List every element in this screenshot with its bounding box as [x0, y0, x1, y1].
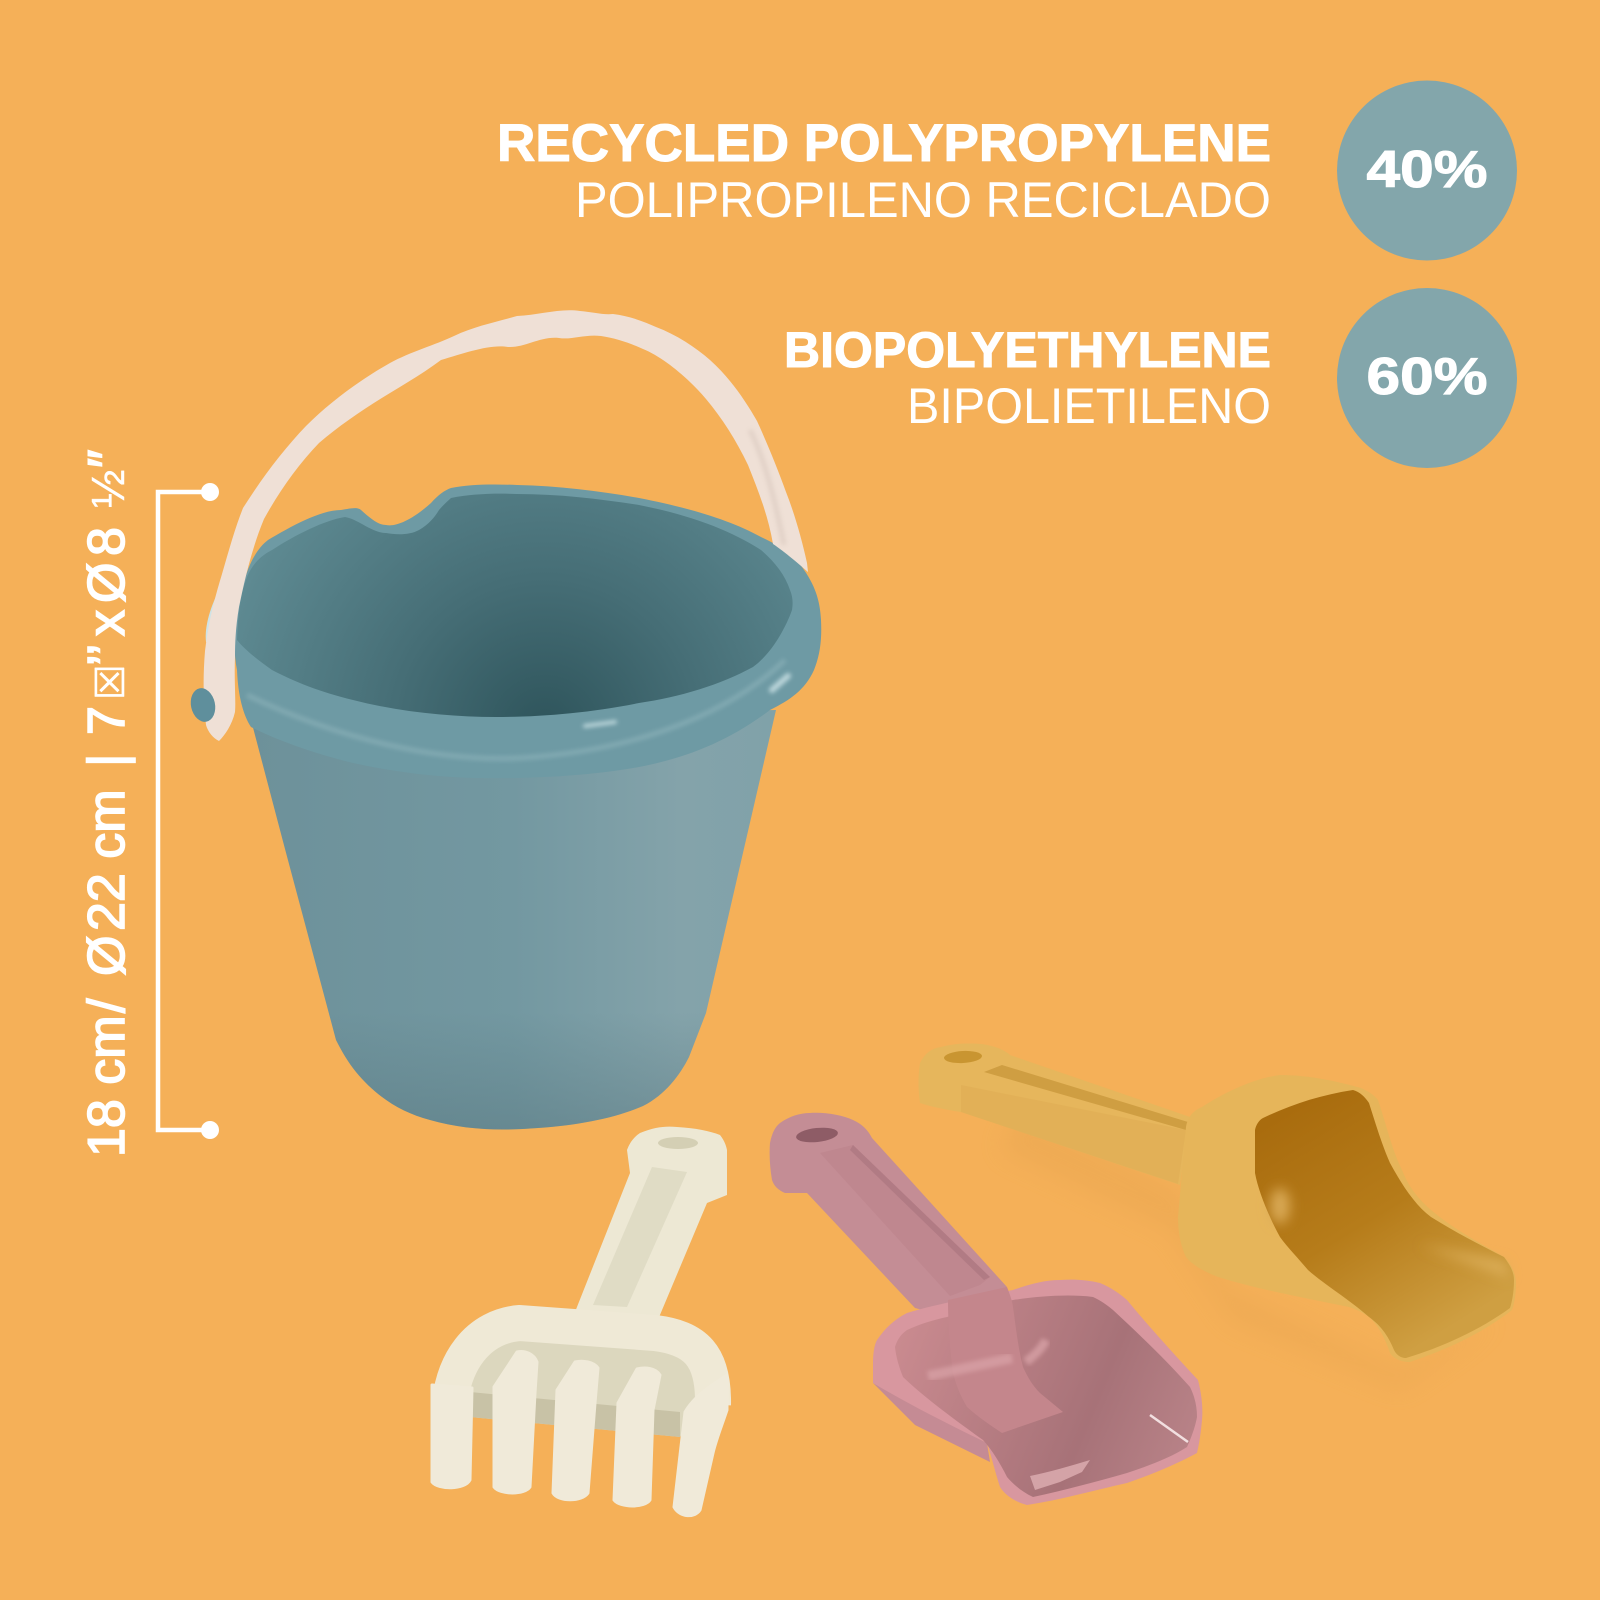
spade underside — [873, 1383, 990, 1462]
dimension label: 8 — [78, 527, 136, 556]
rake tines — [432, 1351, 727, 1516]
illustration: bucket — [188, 310, 821, 1129]
badge: 60%: 60% — [1366, 348, 1488, 406]
dimension label: 7 — [78, 706, 136, 735]
dimension label: ½ — [82, 470, 134, 508]
spade inner — [895, 1296, 1197, 1497]
bucket interior — [237, 494, 793, 717]
dimension label: Ø — [78, 936, 136, 976]
dimension label: 18 cm — [78, 1015, 136, 1157]
bucket handle — [204, 310, 808, 741]
heading: recycled polypropylene: RECYCLED POLYPROPYLENE — [497, 114, 1271, 173]
dimension label: x — [78, 610, 136, 636]
bucket body — [251, 710, 776, 1129]
scoop inner — [1255, 1090, 1514, 1358]
badge: 40% — [1337, 80, 1517, 260]
handle pivot tab — [206, 578, 228, 642]
spade highlights — [928, 1340, 1188, 1490]
dimension label: / — [78, 998, 136, 1013]
spade handle — [770, 1113, 1007, 1320]
subheading: bipolietileno: BIPOLIETILENO — [907, 378, 1271, 434]
dimension label: | — [78, 753, 136, 767]
illustration: pink spade — [770, 1113, 1202, 1505]
dimension label: 22 cm — [78, 789, 136, 931]
rake head — [449, 1323, 713, 1437]
scoop outer — [1178, 1075, 1516, 1362]
badge: 40%: 40% — [1366, 141, 1488, 199]
heading: biopolyethylene: BIOPOLYETHYLENE — [784, 322, 1271, 378]
dimension bracket — [158, 483, 219, 1139]
spade handle tongue — [948, 1287, 1063, 1433]
illustration: yellow scoop — [918, 1043, 1516, 1390]
dimension label: ″ — [78, 450, 136, 468]
subheading: polipropileno reciclado: POLIPROPILENO RECICLADO — [575, 172, 1271, 228]
badge: 60% — [1337, 288, 1517, 468]
dimension label: ’’ — [78, 644, 136, 666]
rake handle — [575, 1127, 727, 1322]
scoop highlights — [1270, 1188, 1510, 1278]
bucket rim — [235, 484, 821, 778]
dimension label: ☒ — [89, 664, 133, 700]
handle bolt — [188, 686, 218, 724]
scoop handle — [918, 1043, 1190, 1185]
spade outer — [873, 1280, 1202, 1505]
dimension label: Ø — [78, 563, 136, 603]
scoop shadow — [1000, 1110, 1500, 1390]
rim glints — [585, 676, 788, 726]
rim highlight — [247, 660, 785, 758]
illustration: cream rake — [432, 1127, 727, 1516]
